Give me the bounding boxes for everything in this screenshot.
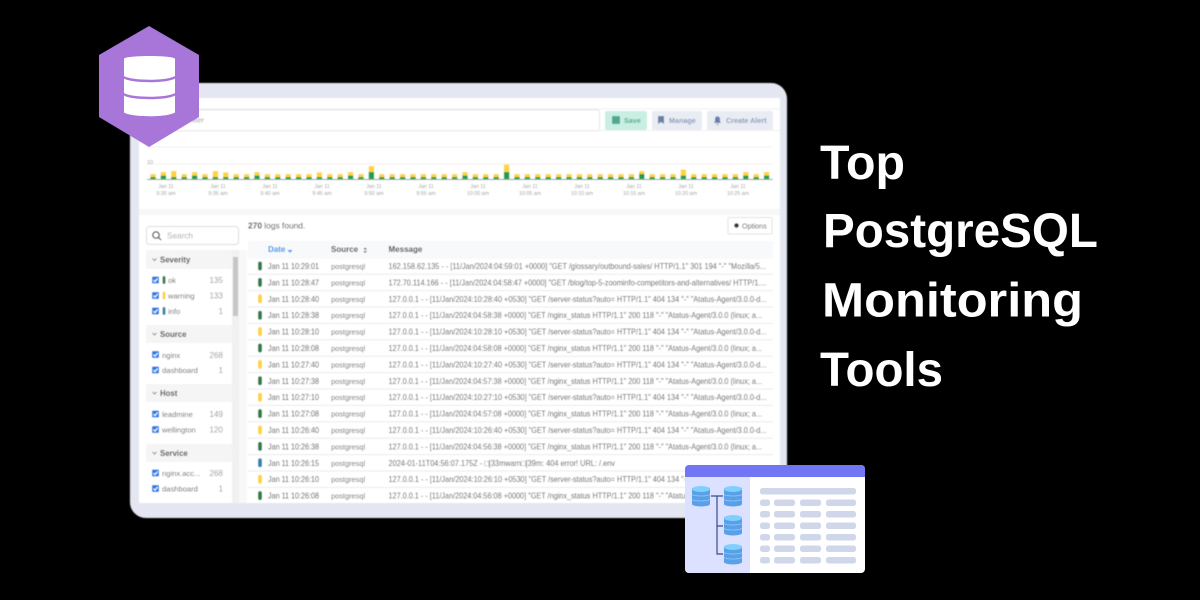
- log row 5: 127.0.0.1 - - [11/Jan/2024:10:28:10 +0530] "GET /server-status?auto= HTTP/1.1" 404 134 "-" "Atatus-Agent/3.0.0-d...: [388, 328, 766, 337]
- chart: log volume bars: Jan 11: [418, 184, 434, 190]
- chart: log volume bars: 10: [147, 160, 153, 166]
- filter group: service: Service: [160, 449, 188, 458]
- log row 10: [258, 409, 762, 419]
- filter group: source: dashboard: [162, 366, 198, 375]
- filter group: source: Source: [160, 330, 187, 339]
- filter group: source: nginx: [162, 351, 180, 360]
- log row 14: 127.0.0.1 - - [11/Jan/2024:10:26:10 +0530] "GET /server-status?auto= HTTP/1.1" 404 134 "-" "Atatus-Agent/3.0.0-d...: [388, 475, 766, 484]
- title: [820, 136, 1098, 397]
- log row 13: [258, 458, 616, 468]
- chart: log volume bars: Jan 11: [574, 184, 590, 190]
- log row 15: Jan 11 10:26:08: [268, 492, 319, 501]
- log row 15: 127.0.0.1 - - [11/Jan/2024:04:56:08 +0000] "GET /nginx_status HTTP/1.1" 200 118 "-" "Atatus-Agent/3.0.0 (linux; a...: [388, 492, 762, 501]
- filter group: host: Host: [160, 389, 178, 398]
- connector lines: [711, 496, 723, 554]
- log row 11: postgresql: [331, 426, 365, 435]
- log row 9: 127.0.0.1 - - [11/Jan/2024:10:27:10 +0530] "GET /server-status?auto= HTTP/1.1" 404 134 "-" "Atatus-Agent/3.0.0-d...: [388, 393, 766, 402]
- chart: log volume bars: 9:45 am: [312, 191, 332, 197]
- chart: log volume bars: 9:40 am: [260, 191, 280, 197]
- log row 8: Jan 11 10:27:38: [268, 377, 319, 386]
- log row 6: 127.0.0.1 - - [11/Jan/2024:04:58:08 +0000] "GET /nginx_status HTTP/1.1" 200 118 "-" "Atatus-Agent/3.0.0 (linux; a...: [388, 344, 762, 353]
- search filter input: Filter: [187, 116, 204, 124]
- filter group: severity: 1: [218, 307, 223, 316]
- filter group: service: dashboard: [162, 484, 198, 494]
- log row 1: Jan 11 10:29:01: [268, 262, 319, 271]
- sidebar: filters: [146, 226, 239, 503]
- log row 12: Jan 11 10:26:38: [268, 442, 319, 451]
- log row 4: Jan 11 10:28:38: [268, 311, 319, 320]
- log row 1: [258, 262, 766, 271]
- title: PostgreSQL: [823, 204, 1098, 258]
- chart: log volume bars: 9:55 am: [416, 191, 436, 197]
- log row 12: [258, 442, 762, 451]
- card: database table illustration: [685, 465, 865, 573]
- log row 2: 172.70.114.166 - - [11/Jan/2024:04:58:47 +0000] "GET /blog/top-5-zoominfo-competitors-and-alternatives/ HTTP/1....: [388, 278, 766, 287]
- database icons: [692, 486, 742, 564]
- filter group: source: [146, 325, 232, 375]
- log row 4: postgresql: [331, 311, 365, 320]
- chart: log volume bars: Jan 11: [626, 184, 642, 190]
- sidebar search box: Search: [167, 232, 193, 240]
- filter group: severity: [146, 250, 232, 316]
- filter group: service: 268: [209, 469, 223, 478]
- filter group: severity: Severity: [160, 256, 191, 264]
- log row 8: [258, 376, 762, 386]
- log row 8: postgresql: [331, 377, 365, 386]
- log row 4: 127.0.0.1 - - [11/Jan/2024:04:58:38 +0000] "GET /nginx_status HTTP/1.1" 200 118 "-" "Atatus-Agent/3.0.0 (linux; a...: [388, 311, 762, 320]
- log row 9: Jan 11 10:27:10: [268, 393, 319, 402]
- log row 13: 2024-01-11T04:56:07.175Z - □[33mwarn□[39m: 404 error! URL: /.env: [388, 459, 616, 468]
- filter group: host: wellington: [161, 426, 196, 434]
- chart: log volume bars: 10:10 am: [571, 191, 594, 197]
- log row 13: postgresql: [331, 459, 365, 468]
- filter group: host: 149: [209, 410, 223, 419]
- chart: log volume bars: Jan 11: [314, 184, 330, 190]
- manage button: [652, 111, 702, 130]
- filter group: source: 1: [218, 366, 223, 375]
- chart: log volume bars: 9:30 am: [156, 191, 176, 197]
- log row 7: Jan 11 10:27:40: [268, 360, 319, 369]
- log row 9: postgresql: [331, 393, 365, 402]
- filter group: host: 120: [209, 426, 223, 434]
- chart: log volume bars: 10:20 am: [675, 191, 698, 197]
- table placeholder rows: [760, 488, 856, 564]
- log row 10: 127.0.0.1 - - [11/Jan/2024:04:57:08 +0000] "GET /nginx_status HTTP/1.1" 200 118 "-" "Atatus-Agent/3.0.0 (linux; a...: [388, 410, 762, 419]
- log row 2: Jan 11 10:28:47: [268, 278, 319, 287]
- log row 4: [258, 311, 762, 320]
- filter group: severity: info: [168, 307, 180, 316]
- log row 7: 127.0.0.1 - - [11/Jan/2024:10:27:40 +0530] "GET /server-status?auto= HTTP/1.1" 404 134 "-" "Atatus-Agent/3.0.0-d...: [388, 360, 766, 369]
- chart: log volume bars: 10:05 am: [519, 191, 542, 197]
- chart: log volume bars: 10:15 am: [623, 191, 646, 197]
- log row 7: [258, 360, 766, 369]
- title: Monitoring: [822, 274, 1083, 328]
- title: Tools: [820, 343, 943, 397]
- options button: Options: [742, 222, 767, 230]
- chart: log volume bars: Jan 11: [210, 184, 226, 190]
- table header: Source: [331, 245, 359, 254]
- log row 14: postgresql: [331, 475, 365, 484]
- manage button: Manage: [669, 116, 696, 125]
- filter group: host: [146, 384, 232, 434]
- log row 5: postgresql: [331, 328, 365, 337]
- log row 11: Jan 11 10:26:40: [268, 426, 319, 435]
- table header: Date: [268, 245, 286, 254]
- log row 5: [258, 327, 766, 337]
- filter group: source: 268: [209, 351, 223, 360]
- log row 6: [258, 344, 762, 353]
- log row 8: 127.0.0.1 - - [11/Jan/2024:04:57:38 +0000] "GET /nginx_status HTTP/1.1" 200 118 "-" "Atatus-Agent/3.0.0 (linux; a...: [388, 377, 762, 386]
- log row 7: postgresql: [331, 360, 365, 369]
- create alert button: [707, 111, 773, 130]
- scrollbar: [232, 250, 239, 503]
- title: Top: [820, 136, 905, 190]
- log row 3: Jan 11 10:28:40: [268, 295, 319, 304]
- table header: [248, 241, 773, 259]
- chart: log volume bars: [139, 130, 780, 197]
- log row 12: postgresql: [331, 442, 365, 451]
- log row 9: [258, 393, 766, 402]
- search filter input: [140, 110, 600, 131]
- table header: Message: [388, 245, 423, 254]
- filter group: severity: warning: [167, 292, 195, 300]
- log row 13: Jan 11 10:26:15: [268, 459, 319, 468]
- filter group: severity: ok: [168, 276, 176, 285]
- log row 11: [258, 426, 766, 435]
- filter group: severity: 135: [209, 276, 223, 285]
- log row 5: Jan 11 10:28:10: [268, 328, 319, 337]
- chart: log volume bars: 9:50 am: [364, 191, 384, 197]
- log table: [248, 241, 773, 503]
- log row 3: 127.0.0.1 - - [11/Jan/2024:10:28:40 +0530] "GET /server-status?auto= HTTP/1.1" 404 134 "-" "Atatus-Agent/3.0.0-d...: [388, 295, 766, 304]
- filter group: host: leadmine: [162, 410, 193, 419]
- panel: dashboard screenshot frame: [130, 83, 787, 518]
- sidebar search box: [146, 226, 238, 244]
- log row 3: postgresql: [331, 295, 365, 304]
- chart: log volume bars: 10:00 am: [467, 191, 490, 197]
- save button: [605, 111, 647, 130]
- chart: log volume bars: Jan 11: [522, 184, 538, 190]
- log row 11: 127.0.0.1 - - [11/Jan/2024:10:26:40 +0530] "GET /server-status?auto= HTTP/1.1" 404 134 "-" "Atatus-Agent/3.0.0-d...: [388, 426, 766, 435]
- filter group: service: nginx.acc...: [162, 469, 200, 478]
- log row 6: Jan 11 10:28:08: [268, 344, 319, 353]
- log row 15: [258, 491, 762, 501]
- filter group: service: 1: [218, 484, 223, 494]
- chart: log volume bars: Jan 11: [262, 184, 278, 190]
- log row 3: [258, 294, 766, 304]
- filter group: service: [146, 444, 232, 494]
- log row 12: 127.0.0.1 - - [11/Jan/2024:04:56:38 +0000] "GET /nginx_status HTTP/1.1" 200 118 "-" "Atatus-Agent/3.0.0 (linux; a...: [388, 442, 762, 451]
- chart: log volume bars: Jan 11: [470, 184, 486, 190]
- log row 6: postgresql: [331, 344, 365, 353]
- log row 15: postgresql: [331, 492, 365, 501]
- chart: log volume bars: Jan 11: [730, 184, 746, 190]
- chart: log volume bars: 9:35 am: [208, 191, 228, 197]
- log row 14: Jan 11 10:26:10: [268, 475, 319, 484]
- options button: [728, 218, 772, 234]
- log row 2: postgresql: [331, 278, 365, 287]
- log row 10: Jan 11 10:27:08: [268, 410, 319, 419]
- log row 2: [258, 278, 766, 287]
- chart: log volume bars: 10:25 am: [727, 191, 750, 197]
- save button: Save: [624, 116, 641, 125]
- text: logs found: 270 logs found.: [248, 220, 305, 230]
- icon: purple database hexagon: [99, 26, 199, 147]
- chart: log volume bars: Jan 11: [158, 184, 174, 190]
- filter group: severity: 133: [209, 292, 223, 300]
- log row 1: postgresql: [331, 262, 365, 271]
- log row 1: 162.158.62.135 - - [11/Jan/2024:04:59:01 +0000] "GET /glossary/outbound-sales/ HTTP/1.1" 301 194 "-" "Mozilla/5...: [388, 262, 766, 271]
- create alert button: Create Alert: [726, 116, 767, 125]
- chart: log volume bars: Jan 11: [678, 184, 694, 190]
- log row 10: postgresql: [331, 410, 365, 419]
- log row 14: [258, 475, 766, 484]
- chart: log volume bars: Jan 11: [366, 184, 382, 190]
